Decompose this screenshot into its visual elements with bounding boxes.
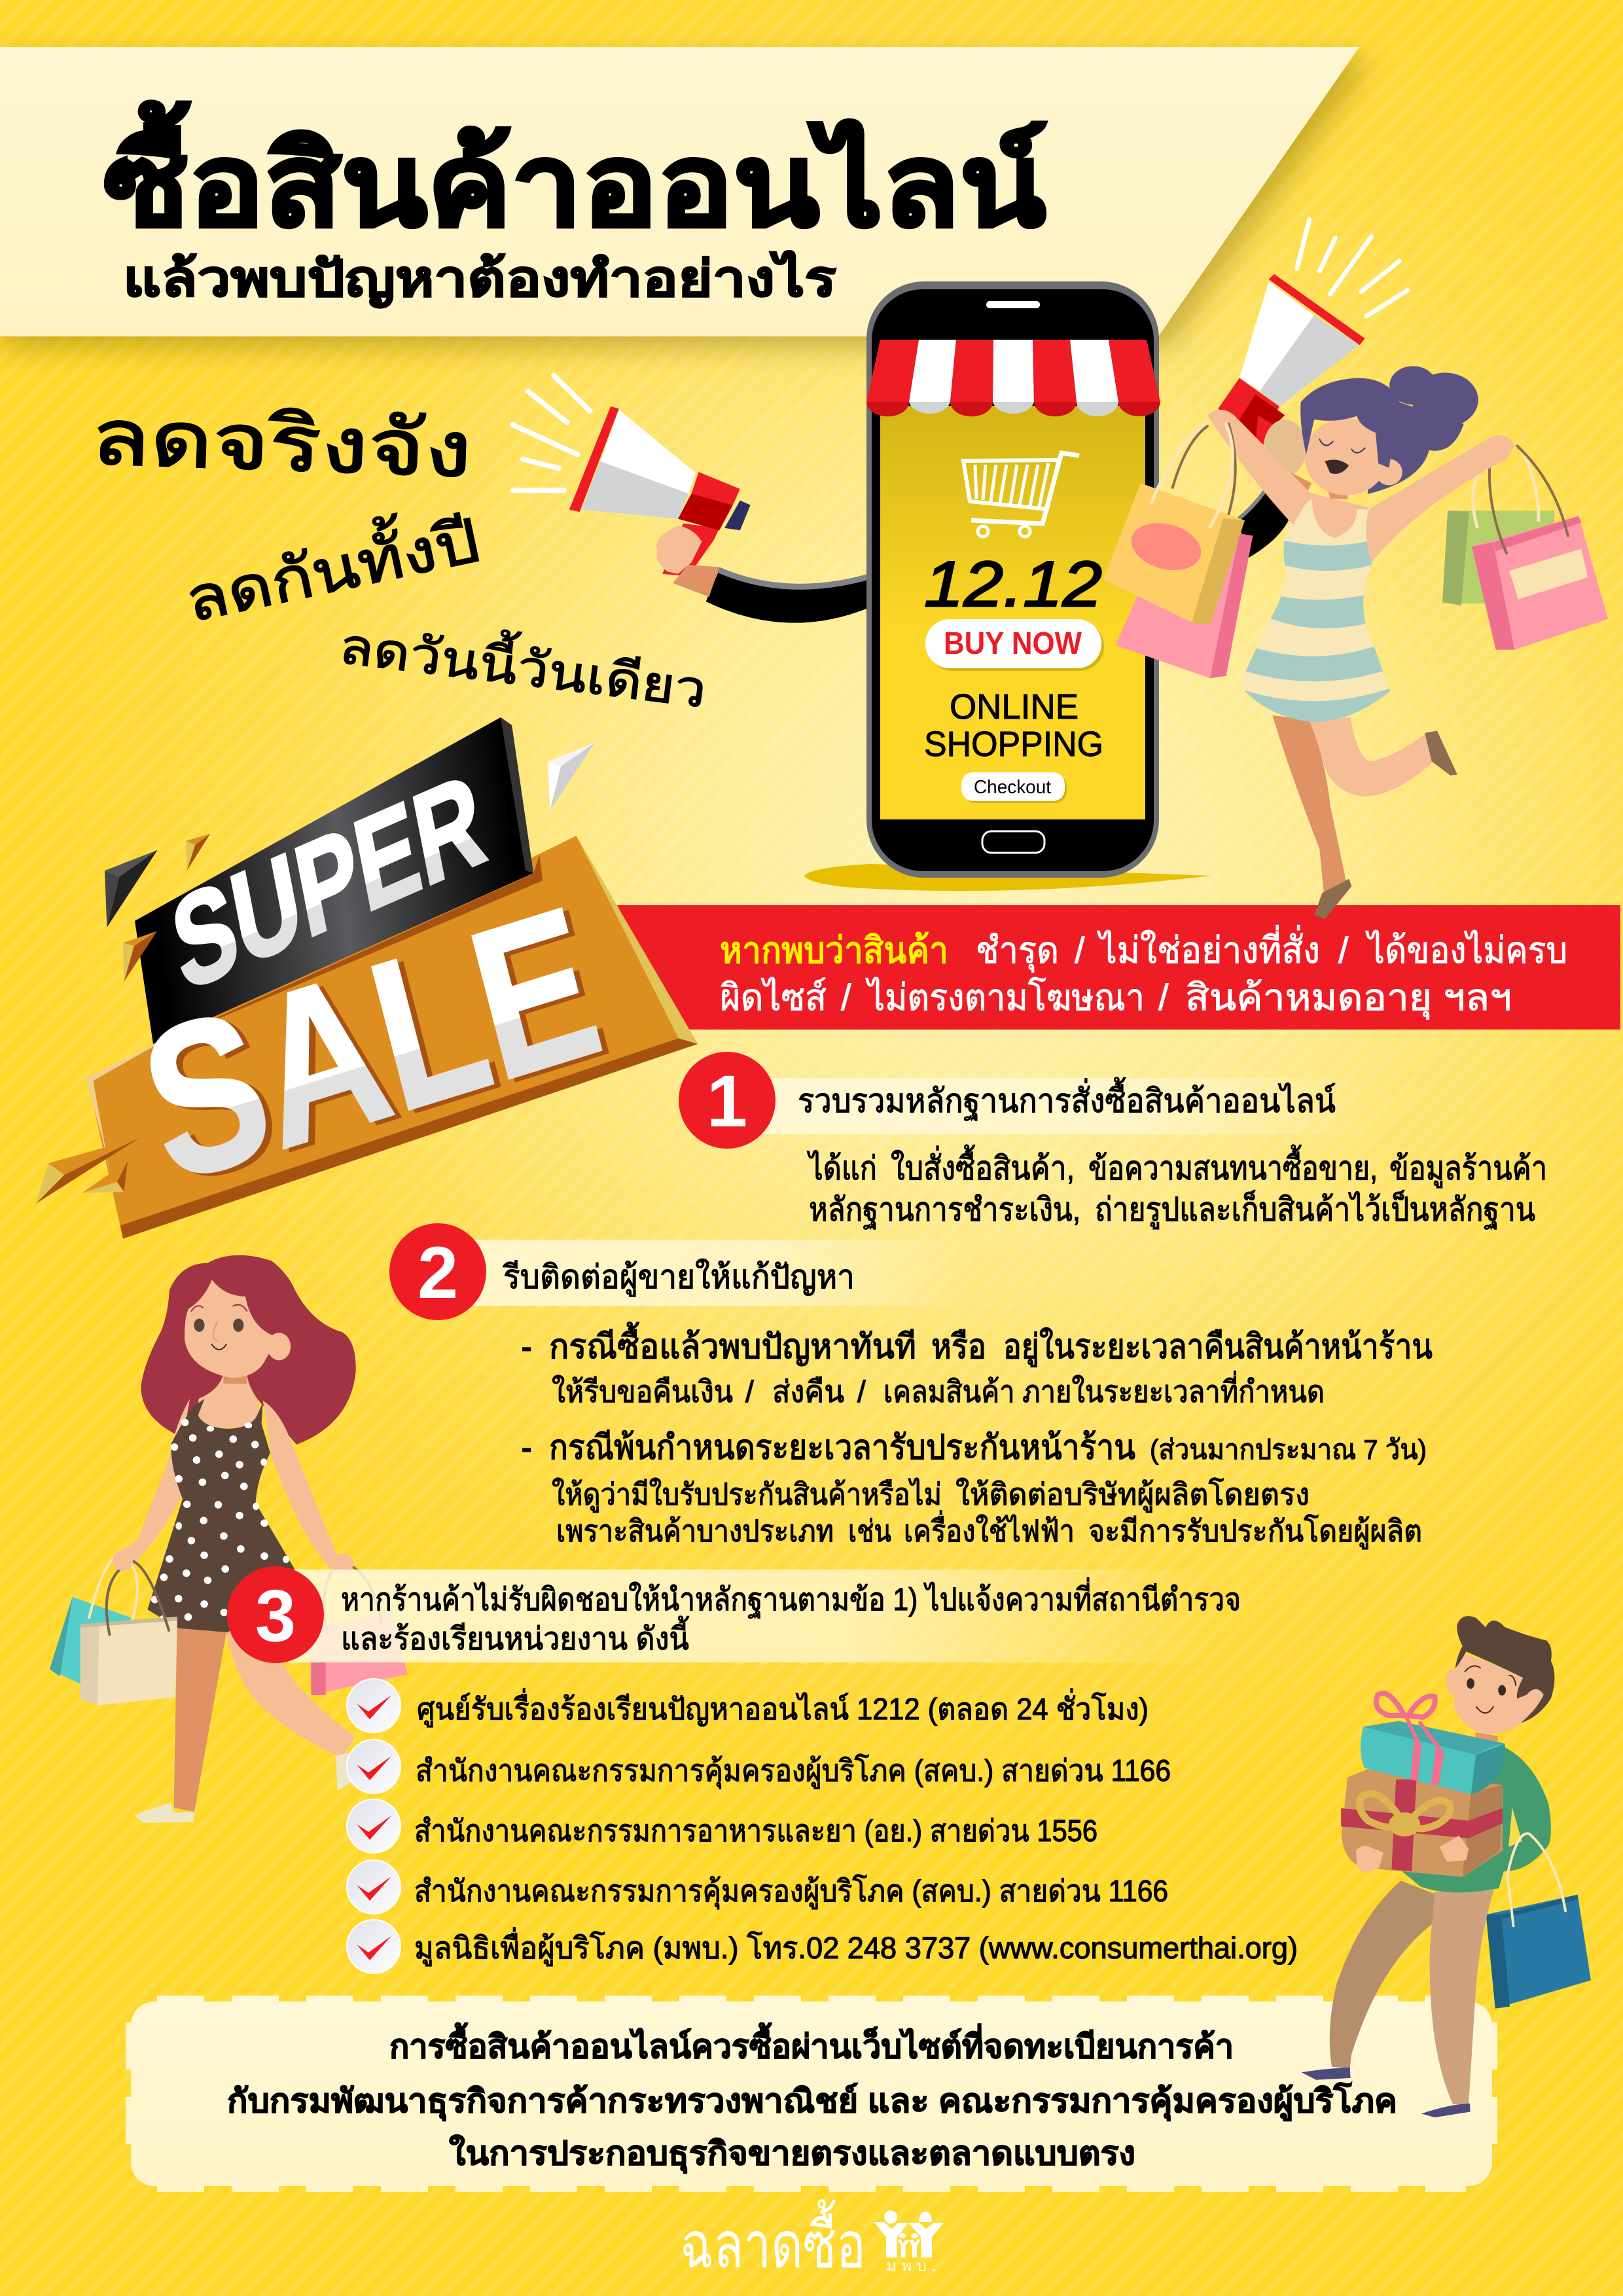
- slogan: discount all year: ลดกันทั้งปี: [178, 497, 485, 635]
- case 1: ส่งคืน: [772, 1374, 844, 1408]
- step 3 text: [341, 1577, 1241, 1657]
- step 1 details: ข้อความสนทนาซื้อขาย,: [1088, 1145, 1378, 1187]
- advice text: ในการประกอบธุรกิจขายตรงและตลาดแบบตรง: [449, 2134, 1135, 2174]
- right bags: [1442, 511, 1554, 603]
- step 1: [679, 1052, 1547, 1229]
- number badge 3: [227, 1566, 324, 1663]
- title: ซื้อสินค้าออนไลน์: [103, 101, 1046, 250]
- red problem band: ไม่ตรงตามโฆษณา: [865, 977, 1145, 1018]
- red problem band: ผิดไซส์: [720, 977, 827, 1018]
- checkout button: Checkout: [974, 777, 1051, 798]
- logo: chalad sue: ฉลาดซื้อ: [680, 2199, 866, 2281]
- subtitle: แล้วพบปัญหาต้องทำอย่างไร: [123, 250, 836, 308]
- super sale tag: [36, 717, 698, 1238]
- case 1: ให้รีบขอคืนเงิน: [552, 1374, 733, 1408]
- man carrying gifts: [1302, 1616, 1591, 2117]
- case 2: เพราะสินค้าบางประเภท: [556, 1514, 834, 1548]
- icon: shopping cart: [963, 453, 1079, 537]
- shoes: [1302, 2068, 1351, 2080]
- teal gift box: [1361, 1693, 1505, 1795]
- step 1 details: [807, 1145, 1547, 1229]
- title banner: [0, 47, 1371, 347]
- red problem band: ได้ของไม่ครบ: [1365, 929, 1567, 971]
- hair: [141, 1255, 356, 1444]
- left bags: [1115, 535, 1253, 678]
- face: [1304, 418, 1388, 495]
- chest: [1287, 492, 1372, 564]
- home button: [982, 831, 1044, 853]
- contact 5: [347, 1920, 1298, 1973]
- contact 2: [347, 1740, 1171, 1793]
- hair back and buns: [1389, 366, 1436, 404]
- red problem band: ไม่ใช่อย่างที่สั่ง: [1097, 925, 1320, 971]
- red problem band: ชำรุด: [976, 929, 1059, 973]
- gold tag: [87, 836, 698, 1238]
- sleeve behind: [1240, 485, 1289, 560]
- slogan: today only: ลดวันนี้วันเดียว: [336, 610, 711, 719]
- date 12.12: 12.12: [924, 548, 1102, 620]
- contact 4: สำนักงานคณะกรรมการคุ้มครองผู้บริโภค (สคบ.) สายด่วน 1166: [414, 1874, 1168, 1910]
- case 2: เครื่องใช้ไฟฟ้า: [904, 1510, 1075, 1548]
- checkout button: [961, 772, 1067, 803]
- number badge 2: 2: [418, 1232, 458, 1314]
- case 1: อยู่ในระยะเวลาคืนสินค้าหน้าร้าน: [1003, 1327, 1433, 1367]
- legs: [1309, 717, 1442, 797]
- screen: [880, 406, 1145, 819]
- red problem band: [617, 905, 1620, 1030]
- number badge 1: [679, 1052, 776, 1149]
- contact 4: [347, 1860, 1168, 1914]
- dress: [1240, 499, 1390, 722]
- right arm: [1365, 435, 1514, 564]
- emblem label: มพบ.: [886, 2257, 936, 2275]
- sale label shadow: SALE: [129, 864, 626, 1230]
- brown gift box: [1341, 1769, 1503, 1877]
- case 1: [521, 1322, 1433, 1408]
- case 1: กรณีซื้อแล้วพบปัญหาทันที: [549, 1322, 916, 1366]
- contact 1: ศูนย์รับเรื่องร้องเรียนปัญหาออนไลน์ 1212 (ตลอด 24 ชั่วโมง): [417, 1688, 1149, 1727]
- woman in polka dot dress: [50, 1255, 408, 1823]
- neck: [1328, 490, 1349, 499]
- online shopping label: [924, 687, 1103, 764]
- contact 1: [347, 1679, 1149, 1732]
- step 2 heading: รีบติดต่อผู้ขายให้แก้ปัญหา: [503, 1259, 855, 1297]
- case 2: เช่น: [848, 1514, 891, 1548]
- number badge 3: 3: [255, 1575, 296, 1657]
- legs: [226, 1632, 355, 1758]
- contact 2: สำนักงานคณะกรรมการคุ้มครองผู้บริโภค (สคบ.) สายด่วน 1166: [416, 1753, 1171, 1789]
- contact 3: สำนักงานคณะกรรมการอาหารและยา (อย.) สายด่วน 1556: [414, 1814, 1097, 1848]
- icon: family emblem: [874, 2210, 944, 2257]
- left bags: [50, 1597, 132, 1685]
- sale label: SALE: [122, 861, 619, 1227]
- case 2: ให้ติดต่อบริษัทผู้ผลิตโดยตรง: [955, 1477, 1310, 1513]
- contact 5: มูลนิธิเพื่อผู้บริโภค (มพบ.) โทร.02 248 3737 (www.consumerthai.org): [414, 1927, 1298, 1966]
- case 2: -: [521, 1429, 532, 1467]
- red problem band: /: [1158, 977, 1169, 1018]
- red problem band: สินค้าหมดอายุ ฯลฯ: [1185, 977, 1512, 1020]
- case 2: ให้ดูว่ามีใบรับประกันสินค้าหรือไม่: [552, 1477, 942, 1513]
- case 1: /: [857, 1374, 866, 1408]
- dress: [147, 1399, 295, 1632]
- neck and chest: [196, 1374, 263, 1428]
- face: [185, 1280, 291, 1378]
- black super tag: [135, 717, 533, 1044]
- step 3 text: หากร้านค้าไม่รับผิดชอบให้นำหลักฐานตามข้อ 1) ไปแจ้งความที่สถานีตำรวจ: [341, 1577, 1241, 1618]
- number badge 1: 1: [707, 1060, 747, 1142]
- blue bag: [1486, 1895, 1591, 2009]
- case 1: หรือ: [931, 1328, 986, 1366]
- right side bag: [310, 1611, 408, 1695]
- step 1 heading: รวบรวมหลักฐานการสั่งซื้อสินค้าออนไลน์: [798, 1077, 1336, 1121]
- left arm: [1207, 410, 1311, 525]
- advice text: กับกรมพัฒนาธุรกิจการค้ากระทรวงพาณิชย์ และ คณะกรรมการคุ้มครองผู้บริโภค: [227, 2081, 1397, 2121]
- buy now button: [925, 619, 1104, 671]
- megaphone: [1240, 281, 1314, 391]
- online shopping label: SHOPPING: [924, 725, 1103, 764]
- red problem band: หากพบว่าสินค้า: [720, 929, 948, 971]
- step 1 details: ถ่ายรูปและเก็บสินค้าไว้เป็นหลักฐาน: [1095, 1190, 1535, 1229]
- case 1: /: [745, 1374, 754, 1408]
- contact checklist: [347, 1679, 1298, 1973]
- awning: [866, 340, 1160, 416]
- sweater: [1402, 1748, 1551, 1893]
- step 1 details: ใบสั่งซื้อสินค้า,: [891, 1145, 1075, 1187]
- case 1: -: [521, 1328, 532, 1366]
- case 2: จะมีการรับประกันโดยผู้ผลิต: [1088, 1514, 1422, 1549]
- advice box: [128, 1999, 1495, 2189]
- red problem band: /: [1075, 929, 1085, 971]
- advice text: [227, 2022, 1397, 2174]
- buy now button: BUY NOW: [944, 626, 1082, 661]
- step 1 details: ข้อมูลร้านค้า: [1389, 1150, 1547, 1188]
- beige bag: [80, 1551, 353, 1706]
- case 2: กรณีพ้นกำหนดระยะเวลารับประกันหน้าร้าน: [549, 1429, 1135, 1467]
- head: [1446, 1616, 1554, 1734]
- super label: SUPER: [162, 746, 494, 1018]
- arms: [114, 1399, 190, 1570]
- decorative shards: [36, 743, 595, 1204]
- case 2: (ส่วนมากประมาณ 7 วัน): [1150, 1434, 1427, 1465]
- case 2: [521, 1429, 1427, 1549]
- legs: [1330, 1881, 1435, 2069]
- step 3: [227, 1566, 1241, 1663]
- step 1 details: ได้แก่: [807, 1150, 877, 1187]
- step 2: [389, 1223, 1433, 1549]
- woman with megaphone and shopping bags: [1103, 220, 1608, 919]
- phone shadow: [804, 864, 1211, 891]
- hands: [1356, 1846, 1383, 1873]
- advice text: การซื้อสินค้าออนไลน์ควรซื้อผ่านเว็บไซต์ที่จดทะเบียนการค้า: [389, 2022, 1234, 2065]
- red problem band: /: [1338, 929, 1349, 971]
- step 3 text: และร้องเรียนหน่วยงาน ดังนี้: [341, 1616, 689, 1657]
- slogan: real discount: ลดจริงจัง: [90, 394, 473, 493]
- online shopping label: ONLINE: [950, 687, 1079, 726]
- contact 3: [347, 1799, 1097, 1853]
- step 1 details: หลักฐานการชำระเงิน,: [809, 1191, 1080, 1229]
- number badge 2: [389, 1223, 486, 1320]
- case 1: เคลมสินค้า ภายในระยะเวลาที่กำหนด: [883, 1371, 1325, 1408]
- shoes: [134, 1803, 194, 1823]
- left megaphone with arm: [512, 376, 867, 623]
- rays: [1297, 220, 1408, 316]
- red problem band: /: [841, 977, 851, 1018]
- phone: [804, 281, 1211, 891]
